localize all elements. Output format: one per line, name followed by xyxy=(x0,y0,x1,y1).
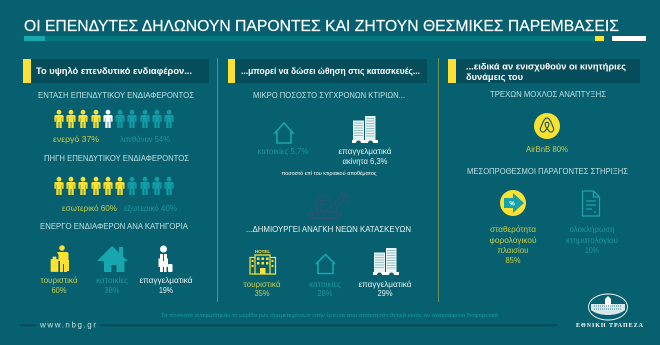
icon: business traveller xyxy=(158,246,172,272)
subheading: current lever: ΤΡΕΧΩΝ ΜΟΧΛΟΣ ΑΝΑΠΤΥΞΗΣ xyxy=(490,90,606,99)
panel: investor interest xyxy=(23,59,209,295)
icon: tourist xyxy=(51,245,69,272)
label: active: ενεργό 37% xyxy=(53,135,99,144)
value: tourism: 60% xyxy=(52,286,66,295)
label: land registry: κτηματολογίου xyxy=(566,236,618,245)
label: tax stability: σταθερότητα xyxy=(490,225,536,234)
note: building stock: ποσοστό επί του κτιριακού αποθέματος xyxy=(282,170,377,177)
icon: document xyxy=(582,191,600,216)
icon: new house xyxy=(316,254,335,274)
label: hotels: τουριστικά xyxy=(244,280,281,289)
subheading: source: ΠΗΓΗ ΕΠΕΝΔΥΤΙΚΟΥ ΕΝΔΙΑΦΕΡΟΝΤΟΣ xyxy=(44,154,189,163)
value: commercial: 19% xyxy=(159,286,173,295)
panel: drivers xyxy=(448,59,644,329)
value: commercial share: ακίνητα 6,3% xyxy=(342,157,388,166)
label: land registry xyxy=(566,225,618,255)
label: land registry: 10% xyxy=(585,246,599,255)
label: new commercial: επαγγελματικά xyxy=(358,280,412,289)
icon: crane xyxy=(308,192,348,218)
label: tax stability: 85% xyxy=(506,256,520,265)
heading: drivers: δυνάμεις του xyxy=(466,72,523,82)
label: latent: λανθάνον 54% xyxy=(120,135,170,144)
icon: towers xyxy=(352,116,378,143)
label: domestic: εσωτερικό 60% xyxy=(62,204,117,213)
title: ΟΙ ΕΠΕΝΔΥΤΕΣ ΔΗΛΩΝΟΥΝ ΠΑΡΟΝΤΕΣ ΚΑΙ ΖΗΤΟΥΝ ΘΕΣΜΙΚΕΣ ΠΑΡΕΜΒΑΣΕΙΣ xyxy=(24,18,619,35)
subheading: intensity: ΕΝΤΑΣΗ ΕΠΕΝΔΥΤΙΚΟΥ ΕΝΔΙΑΦΕΡΟΝΤΟΣ xyxy=(38,91,194,100)
label: commercial: επαγγελματικά xyxy=(140,276,193,285)
icon: tax stability xyxy=(500,190,526,216)
value: homes: 38% xyxy=(104,286,120,295)
label: commercial share: επαγγελματικά xyxy=(338,147,392,156)
logo: national bank: ΕΘΝΙΚΗ ΤΡΑΠΕΖΑ xyxy=(576,323,644,329)
title bar xyxy=(24,36,646,41)
subheading: medium-term: ΜΕΣΟΠΡΟΘΕΣΜΟΙ ΠΑΡΑΓΟΝΤΕΣ ΣΤΗΡΙΞΗΣ xyxy=(467,167,628,176)
footnote: Τα ποσοστά αναφέρθηκαν τη μερίδα των συμμετεχόντων στην έρευνα που απάντησαν θετικά εκτός αν αναγράφεται διαφορετικά xyxy=(161,312,498,319)
heading: drivers: ...ειδικά αν ενισχυθούν οι κινητήριες xyxy=(466,62,626,72)
value: new homes: 28% xyxy=(318,289,332,298)
subheading: new construction: ...ΔΗΜΙΟΥΡΓΕΙ ΑΝΑΓΚΗ ΝΕΩΝ ΚΑΤΑΣΚΕΥΩΝ xyxy=(246,225,411,234)
label: tax stability: φορολογικού xyxy=(490,236,536,245)
icon: house outline xyxy=(274,123,294,143)
heading: high interest xyxy=(23,59,209,83)
icon: hotel: HOTEL xyxy=(255,249,270,254)
label: tax stability xyxy=(490,225,536,265)
subheading: by category: ΕΝΕΡΓΟ ΕΝΔΙΑΦΕΡΟΝ ΑΝΑ ΚΑΤΗΓΟΡΙΑ xyxy=(40,222,189,231)
website: www.nbg.gr xyxy=(39,320,96,330)
pictogram: intensity xyxy=(54,110,174,128)
heading: high interest: Το υψηλό επενδυτικό ενδιαφέρον... xyxy=(36,66,192,76)
panel: construction xyxy=(228,59,427,298)
heading: construction boost: ...μπορεί να δώσει ώθηση στις κατασκευές... xyxy=(241,66,420,76)
label: foreign: εξωτερικό 40% xyxy=(124,204,177,213)
label: tourism: τουριστικά xyxy=(40,276,78,285)
label: homes: κατοικίες xyxy=(96,276,128,285)
subheading: modern buildings: ΜΙΚΡΟ ΠΟΣΟΣΤΟ ΣΥΓΧΡΟΝΩΝ ΚΤΙΡΙΩΝ... xyxy=(253,91,405,100)
icon: tax stability: % xyxy=(509,202,515,208)
logo: national bank xyxy=(576,294,644,329)
icon: hotel xyxy=(250,249,276,274)
icon: new towers xyxy=(373,248,399,275)
label: tax stability: πλαισίου xyxy=(498,246,528,255)
label: homes share: κατοικίες 5,7% xyxy=(258,147,308,156)
heading: construction boost xyxy=(228,59,427,83)
label: airbnb: AirBnB 80% xyxy=(526,145,568,154)
value: new commercial: 29% xyxy=(378,289,392,298)
label: new homes: κατοικίες xyxy=(309,280,341,289)
pictogram: source xyxy=(54,177,174,195)
label: land registry: ολοκλήρωση xyxy=(570,225,614,234)
icon: airbnb xyxy=(534,113,560,139)
value: hotels: 35% xyxy=(254,289,270,298)
heading: drivers xyxy=(448,59,640,83)
icon: house xyxy=(97,246,128,272)
